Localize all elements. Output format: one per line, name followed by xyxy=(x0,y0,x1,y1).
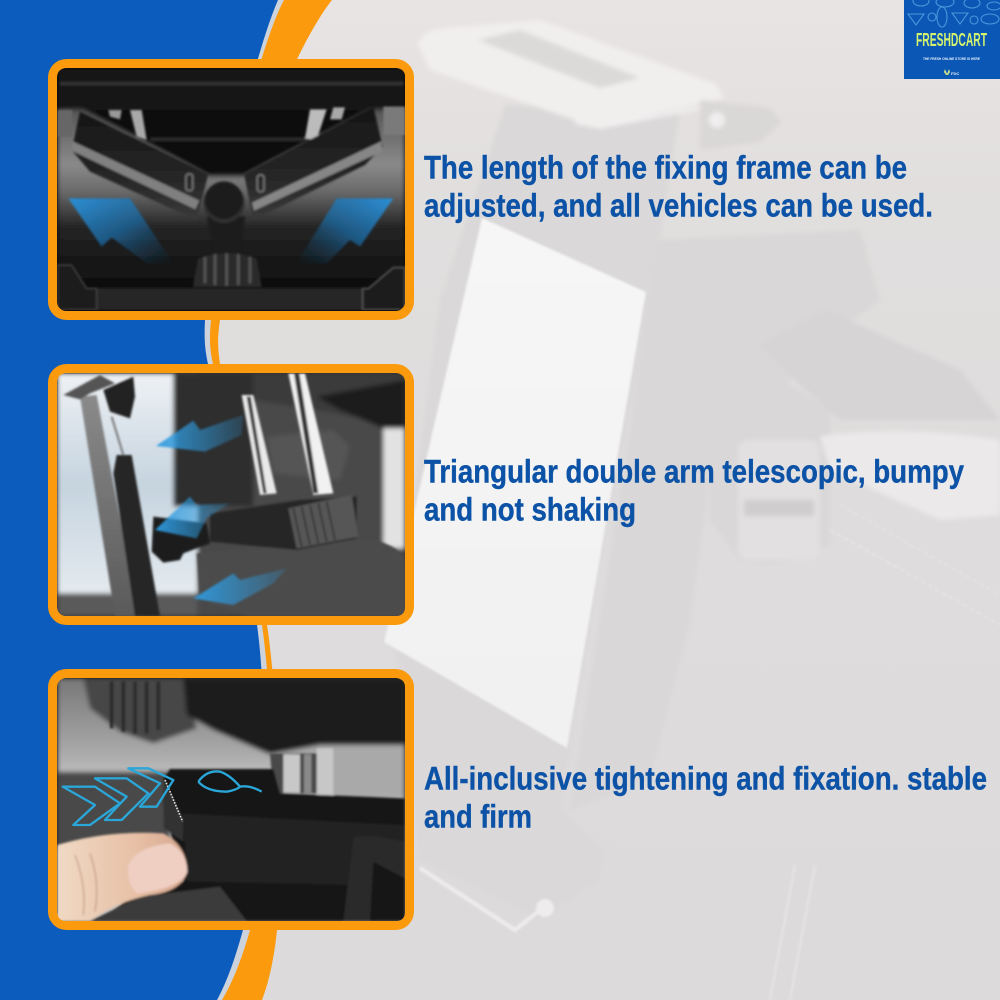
text block: adjustable length xyxy=(424,150,933,224)
icon: left blue arrow xyxy=(68,198,173,263)
text block: telescopic arm: and not shaking xyxy=(424,492,636,528)
text block: adjustable length: adjusted, and all vehicles can be used. xyxy=(424,188,933,224)
panel: tightening photo xyxy=(52,674,410,926)
panel: telescopic arm photo xyxy=(52,368,410,620)
icon: upper blue arrow xyxy=(156,415,243,452)
logo: Freshdcart: FDC xyxy=(951,71,959,76)
text block: adjustable length: The length of the fixing frame can be xyxy=(424,150,907,186)
photo: double arm from side xyxy=(57,373,405,616)
photo: fixing frame arms xyxy=(57,68,405,310)
orange curved band xyxy=(0,0,332,1000)
photo: finger pressing clamp xyxy=(57,678,405,921)
blue curved panel xyxy=(0,0,278,1000)
icon: middle blue arrow xyxy=(155,497,230,538)
text block: tightening: and firm xyxy=(424,798,532,834)
icon: right blue arrow xyxy=(297,198,393,263)
text block: tightening xyxy=(424,760,987,834)
logo: Freshdcart: THE FRESH ONLINE STORE IS HERE xyxy=(923,57,981,61)
pale edge between blue and orange xyxy=(0,0,284,1000)
text block: telescopic arm xyxy=(424,454,964,528)
logo: Freshdcart xyxy=(904,0,1000,79)
panel: adjustable frame photo xyxy=(52,64,410,316)
icon: lower blue arrow xyxy=(193,568,287,605)
tablet screen xyxy=(384,218,646,748)
icon: outline chevron arrows xyxy=(63,768,262,825)
